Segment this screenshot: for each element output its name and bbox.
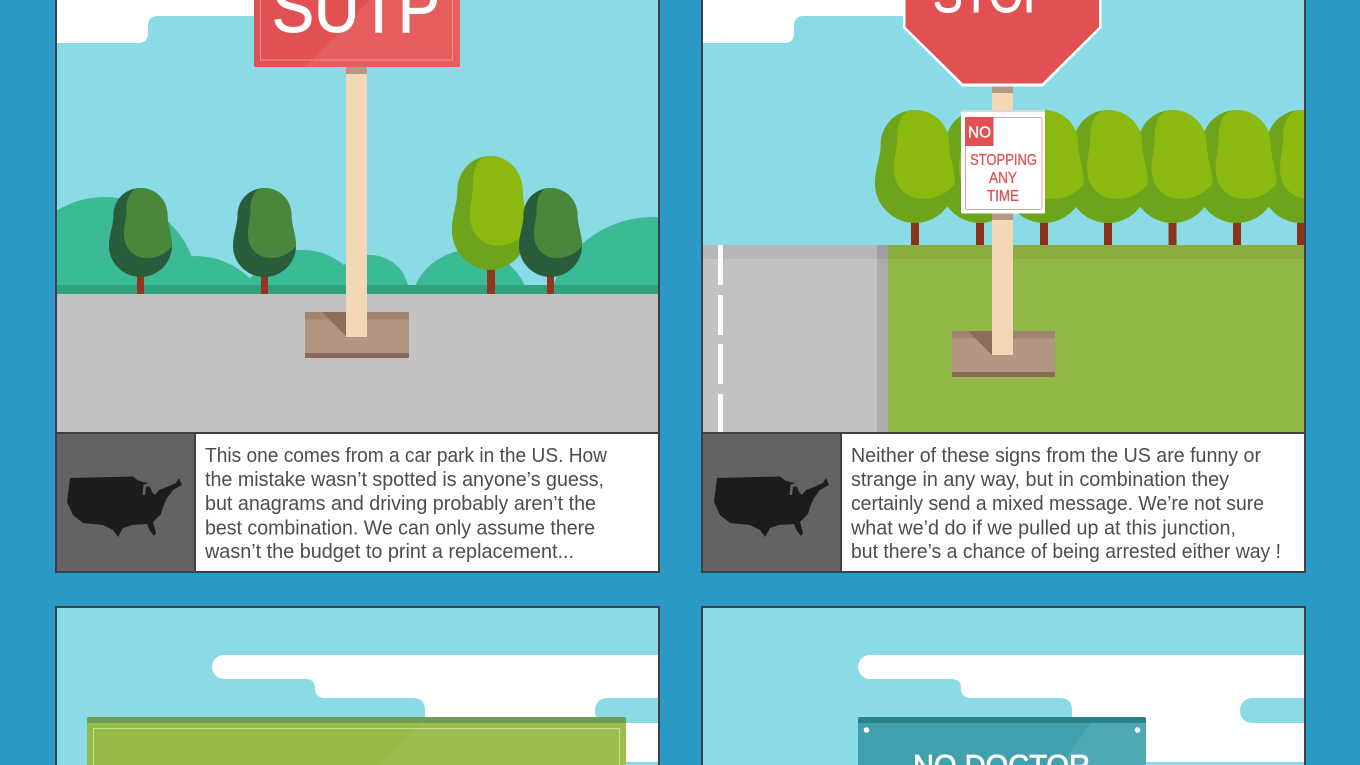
caption text: strange in any way, but in combination they (851, 468, 1230, 491)
sign: no stopping any time (961, 110, 1045, 214)
sign: no stopping any time: STOPPING (970, 152, 1037, 169)
icon: US map (67, 476, 182, 537)
cloud (858, 655, 1320, 762)
road (703, 245, 888, 432)
illustration: sky and teal sign (703, 608, 1320, 765)
sign: green (87, 717, 626, 765)
caption text: Neither of these signs from the US are funny or (851, 444, 1261, 467)
sky (703, 0, 1304, 245)
sign: no doctor (858, 717, 1146, 765)
panel: no doctor sign (702, 607, 1320, 765)
panel frame (56, 0, 659, 572)
caption flag cell (703, 434, 840, 571)
panel frame (702, 0, 1305, 572)
tree: dark middle (233, 188, 296, 294)
sign: STOP octagon (903, 0, 1102, 86)
sign: no stopping any time: TIME (987, 188, 1019, 205)
caption text: the mistake wasn’t spotted is anyone’s guess, (205, 468, 604, 491)
sign post (346, 67, 367, 337)
icon: US map (714, 476, 829, 537)
caption text (842, 434, 1304, 571)
sky (57, 0, 658, 285)
illustration: sky and green sign (57, 608, 675, 765)
caption text: but there’s a chance of being arrested either way ! (851, 540, 1281, 563)
sign: no stopping any time: NO (968, 124, 991, 142)
caption text (196, 434, 658, 571)
panel frame (702, 607, 1305, 765)
illustration: car park scene (57, 0, 658, 432)
illustration: junction scene (703, 0, 1352, 432)
sign: SUTP (254, 0, 460, 67)
caption text: This one comes from a car park in the US. How (205, 444, 607, 467)
tree: dark right (519, 188, 582, 294)
sky (57, 608, 658, 765)
tree: dark left (109, 188, 172, 294)
hedge band (57, 285, 658, 294)
row of trees (875, 110, 1304, 245)
sign base (952, 331, 1055, 377)
panel: SUTP sign (55, 0, 660, 573)
caption flag cell (57, 434, 194, 571)
grass (888, 245, 1304, 432)
cloud (57, 0, 262, 43)
cloud (703, 0, 908, 43)
sign: no stopping any time: ANY (989, 170, 1017, 187)
cloud (212, 655, 675, 762)
sign base (305, 312, 409, 358)
sky (703, 608, 1304, 765)
tree: light green (452, 156, 525, 294)
caption text: what we’d do if we pulled up at this junction, (850, 516, 1236, 540)
caption text: best combination. We can only assume there (205, 516, 595, 540)
panel frame (56, 607, 659, 765)
caption text: but anagrams and driving probably aren’t the (205, 492, 596, 515)
hills (57, 197, 658, 285)
caption text: certainly send a mixed message. We’re not sure (851, 492, 1264, 515)
road surface (57, 294, 658, 432)
panel: STOP and no stopping signs (702, 0, 1352, 572)
sign post (992, 86, 1013, 355)
panel: green sign (56, 607, 675, 765)
caption text: wasn’t the budget to print a replacement... (204, 540, 574, 563)
